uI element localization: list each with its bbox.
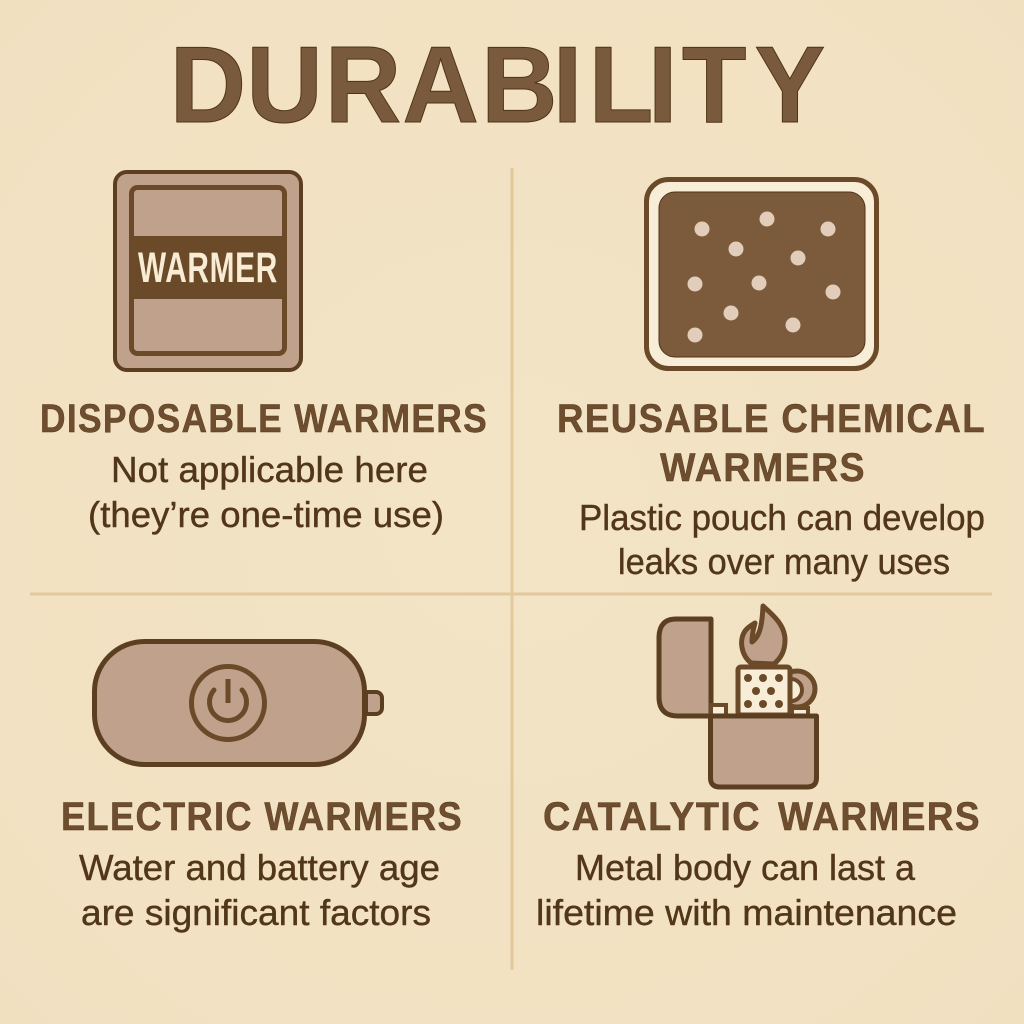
lighter lid: [659, 619, 711, 716]
heading: disposable warmers: DISPOSABLE WARMERS: [40, 397, 488, 441]
heading: catalytic warmers: CATALYTIC: [543, 795, 761, 839]
description: electric warmers: are significant factors: [81, 892, 431, 933]
wheel: [779, 671, 815, 707]
panel: electric warmers: [61, 642, 463, 933]
heading: catalytic warmers: WARMERS: [778, 795, 981, 839]
description: reusable chemical warmers: [579, 497, 985, 582]
description: reusable chemical warmers: leaks over many uses: [618, 541, 950, 582]
heading: reusable chemical warmers: [557, 397, 986, 490]
heading: reusable chemical warmers: REUSABLE CHEMICAL: [557, 397, 986, 441]
description: disposable warmers: Not applicable here: [111, 449, 428, 490]
heading: catalytic warmers: [543, 795, 981, 839]
panel: disposable warmers: [40, 172, 488, 535]
icon: disposable warmer packet: WARMER: [138, 244, 278, 292]
heading: electric warmers: ELECTRIC WARMERS: [61, 795, 463, 839]
description: catalytic warmers: lifetime with maintenance: [536, 892, 957, 933]
heading: reusable chemical warmers: WARMERS: [660, 446, 866, 490]
description: electric warmers: [79, 847, 440, 933]
icon: catalytic lighter-style warmer: [659, 606, 816, 787]
description: catalytic warmers: [536, 847, 957, 933]
icon: disposable warmer packet: [115, 172, 301, 370]
flame: [742, 606, 785, 664]
panel: reusable chemical warmers: [557, 180, 986, 582]
description: electric warmers: Water and battery age: [79, 847, 440, 888]
description: reusable chemical warmers: Plastic pouch can develop: [579, 497, 985, 538]
icon: reusable gel pouch: [646, 180, 876, 368]
description: disposable warmers: (they’re one-time use): [88, 494, 444, 535]
description: catalytic warmers: Metal body can last a: [575, 847, 916, 888]
hinge tabs: [711, 705, 808, 716]
description: disposable warmers: [88, 449, 444, 535]
icon: electric hand warmer: [94, 642, 382, 764]
title: DURABILITY: [170, 24, 825, 145]
panel: catalytic warmers: [536, 606, 981, 933]
lighter body: [710, 716, 816, 787]
insert with vent holes: [738, 667, 790, 715]
